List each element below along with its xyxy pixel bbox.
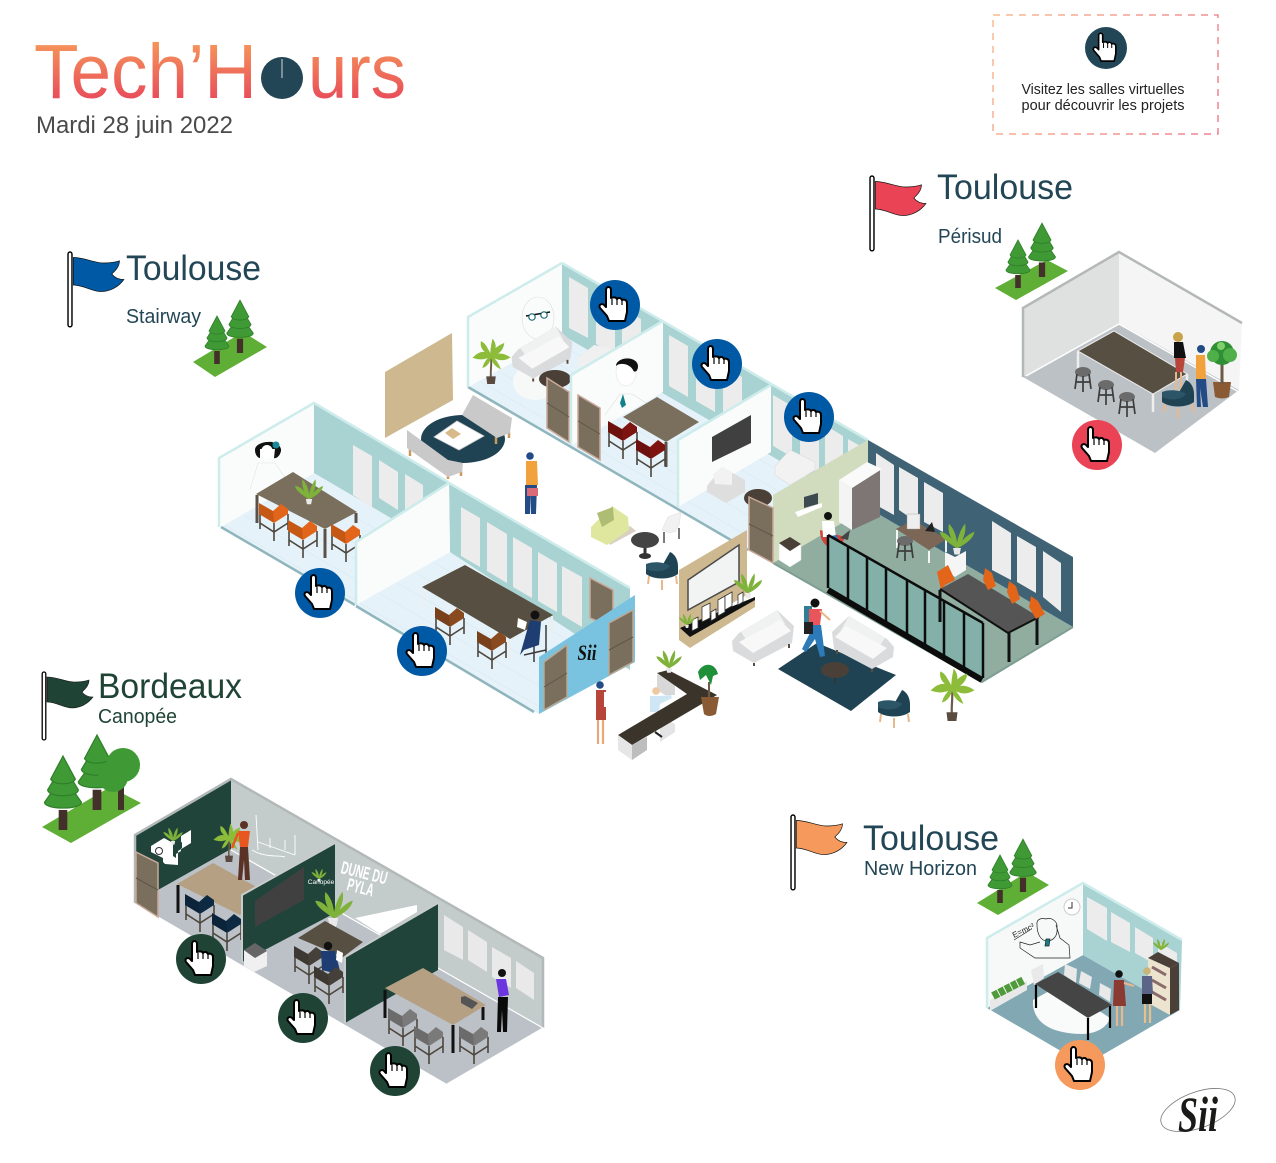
heading: Toulouse New Horizon [791, 815, 999, 890]
table [623, 397, 699, 467]
people [1173, 332, 1208, 407]
legend text [1022, 82, 1184, 114]
room: New Horizon [987, 883, 1182, 1065]
legend text: pour découvrir les projets [1022, 98, 1184, 114]
armchairs [707, 450, 815, 503]
table plant [295, 480, 323, 504]
TV wall [679, 530, 762, 648]
planter plants [679, 574, 762, 628]
blue entrance wall [539, 595, 635, 714]
logo: Sii [1155, 1080, 1241, 1142]
stool [897, 536, 913, 561]
woman in purple [496, 969, 509, 1032]
round rug [1033, 985, 1110, 1034]
orange chairs along wall [983, 568, 1045, 619]
shelf cubes [151, 830, 191, 865]
window panels [1087, 897, 1177, 970]
divider 2 [345, 903, 438, 1023]
table 1 [177, 863, 262, 915]
window panels [444, 915, 534, 1000]
heading: Bordeaux Canopée: Canopée [98, 706, 177, 728]
navy chairs [185, 894, 241, 951]
picture shelf [680, 597, 755, 637]
armchair [1162, 380, 1194, 418]
person walking [802, 598, 830, 657]
room: Stairway long room [355, 483, 634, 714]
text: DUNE DU PYLA: PYLA [345, 874, 376, 900]
heading: Toulouse Stairway [68, 249, 261, 328]
gray chairs [388, 1008, 488, 1064]
green armchair [591, 506, 636, 545]
title: urs [308, 29, 406, 115]
room: Stairway far left [219, 403, 449, 605]
trees: New Horizon [977, 839, 1049, 915]
table [422, 565, 553, 660]
button: Périsud [1072, 420, 1122, 470]
round table [631, 532, 659, 559]
room: Stairway right office [678, 385, 815, 507]
portrait sketch with glasses [522, 297, 554, 339]
text: DUNE DU PYLA [339, 857, 389, 900]
clock icon replacing the letter o [261, 57, 303, 99]
white sofa left [732, 610, 794, 666]
clock icon [156, 848, 162, 854]
side cabinet [779, 537, 801, 567]
lounge: small seating [591, 506, 681, 590]
trees: Bordeaux [42, 735, 141, 843]
screen [688, 545, 739, 610]
title [34, 29, 406, 115]
wall sketch [252, 815, 295, 857]
text: DUNE DU PYLA: DUNE DU [339, 857, 389, 888]
heading: Bordeaux Canopée [42, 667, 242, 740]
heading: Toulouse Périsud [870, 168, 1073, 251]
room: Stairway top wing back wall and floor [468, 263, 868, 563]
palm plant [932, 670, 973, 721]
coffee table [434, 421, 484, 450]
heading: Toulouse Périsud: Périsud [938, 226, 1002, 248]
button: Bordeaux room 2 [278, 993, 328, 1043]
button: Stairway room 4 [692, 339, 742, 389]
desk plant [657, 651, 681, 673]
heading: Bordeaux Canopée: Bordeaux [98, 667, 242, 706]
button: Bordeaux room 1 [176, 934, 226, 984]
brown chairs [435, 607, 506, 669]
legend box [993, 15, 1218, 134]
date subtitle: Mardi 28 juin 2022 [36, 112, 233, 139]
table [256, 472, 357, 558]
plant on cube [940, 525, 974, 577]
icon: legend pointer [1085, 27, 1127, 69]
wardrobe [839, 462, 882, 530]
rug [778, 643, 896, 711]
plant in corner [215, 825, 244, 862]
gray sofa right [462, 395, 512, 444]
door [749, 497, 773, 563]
shelf with books [795, 493, 822, 517]
door [578, 395, 600, 460]
stools [1075, 367, 1135, 417]
heading: Toulouse Stairway: Toulouse [126, 249, 261, 288]
button: Bordeaux room 3 [370, 1046, 420, 1096]
person: woman in red [596, 681, 607, 744]
room: dark blue open space [773, 440, 1073, 682]
white chairs [1031, 964, 1111, 1002]
stool behind glass [865, 580, 881, 605]
heading: Toulouse New Horizon: New Horizon [864, 858, 977, 880]
dark chair [314, 966, 343, 1004]
woman on phone [232, 821, 250, 880]
Einstein sketch [1011, 918, 1070, 958]
plant [474, 340, 509, 384]
room: Stairway middle office [570, 321, 699, 477]
table [1035, 972, 1112, 1040]
table 3 [385, 968, 486, 1053]
screen [255, 867, 304, 927]
desk with coffee machine [896, 514, 947, 563]
printer [244, 943, 267, 972]
button: New Horizon [1055, 1040, 1105, 1090]
round rug [513, 364, 557, 400]
wall screen [712, 415, 751, 462]
reception desk [618, 651, 719, 760]
title: Tech’H [34, 29, 257, 115]
logo: Sii: Sii [1178, 1086, 1218, 1142]
Einstein sketch: E=mc² [1011, 921, 1036, 940]
dune drawing [355, 905, 417, 934]
tan wall panel [385, 333, 453, 438]
portrait sketch with hair and bow [250, 442, 290, 490]
round table [539, 370, 571, 388]
white sofa [512, 327, 572, 381]
heading: Toulouse Stairway: Stairway [126, 306, 201, 328]
small armchair [577, 345, 610, 368]
bookshelf [1148, 939, 1179, 1015]
room: Stairway top-left office [468, 263, 610, 400]
portrait sketch [605, 358, 648, 415]
door [136, 852, 158, 917]
door left [544, 645, 567, 710]
planter [990, 980, 1027, 1011]
lounge: round rug with sofas [407, 395, 512, 479]
Sii wall logo: Sii [578, 640, 597, 665]
button: Stairway room 2 [397, 626, 447, 676]
person with laptop [820, 512, 850, 567]
windows [876, 453, 1061, 612]
room: Périsud [1023, 252, 1242, 453]
back door [590, 578, 613, 628]
trees: Périsud [995, 223, 1068, 300]
dark chairs [294, 946, 323, 984]
white sofa right [832, 616, 894, 672]
palm in pot [698, 665, 719, 716]
fern [316, 893, 352, 927]
gray sofa left [407, 430, 463, 479]
button: Stairway room 1 [295, 568, 345, 618]
orange chairs [259, 503, 360, 562]
legend text: Visitez les salles virtuelles [1022, 82, 1184, 98]
person: orange sweater [525, 452, 538, 514]
two women [1113, 967, 1153, 1026]
door right [609, 610, 633, 675]
trees: Stairway [193, 300, 267, 377]
door [547, 378, 569, 442]
person reading [517, 610, 546, 662]
dark meeting table [940, 574, 1039, 662]
receptionist [650, 687, 672, 737]
red chairs [608, 421, 665, 477]
button: Stairway room 5 [784, 392, 834, 442]
frames [692, 592, 743, 631]
orange chair near table [937, 565, 955, 590]
white chair [662, 512, 681, 543]
glass partition [828, 535, 983, 680]
round coffee table [821, 662, 849, 683]
table 2 [298, 921, 363, 957]
clock [1064, 899, 1080, 915]
logo Canopée: Canopée [308, 879, 335, 886]
heading: Toulouse New Horizon: Toulouse [863, 819, 999, 858]
navy armchair [646, 552, 678, 590]
heading: Toulouse Périsud: Toulouse [937, 168, 1073, 207]
round table [744, 489, 772, 507]
shelf plant [164, 828, 182, 845]
navy armchair [878, 690, 910, 728]
potted plant [1207, 341, 1237, 398]
button: Stairway room 3 [590, 280, 640, 330]
meeting table [1078, 331, 1187, 412]
man in navy [321, 942, 343, 975]
room: Bordeaux [135, 779, 543, 1084]
divider 1 [242, 843, 335, 962]
